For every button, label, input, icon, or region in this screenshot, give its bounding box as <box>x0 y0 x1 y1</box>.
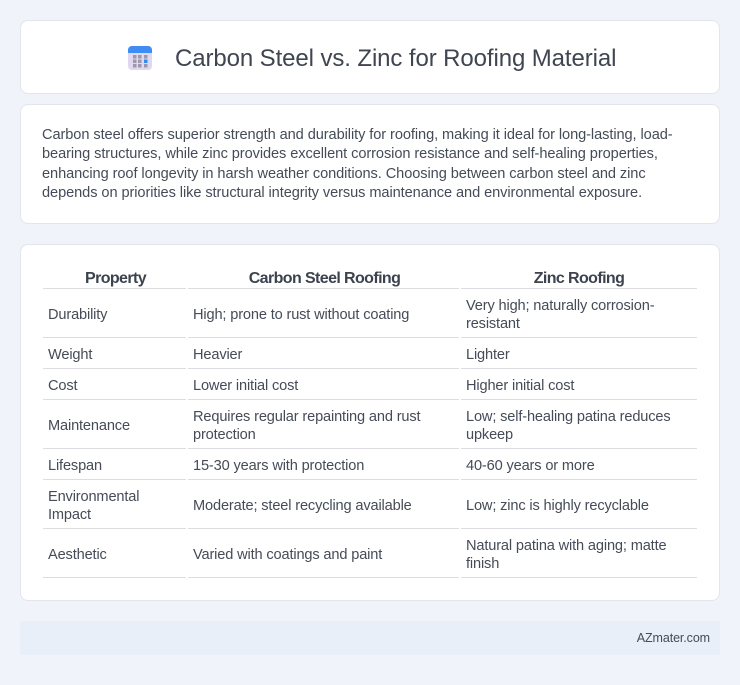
row: maintenance: protection <box>193 427 256 443</box>
summary panel <box>20 104 720 224</box>
row: weight: Weight <box>48 347 92 363</box>
row: cost <box>48 378 574 394</box>
row: durability: High; prone to rust without coating <box>193 307 409 323</box>
row: maintenance: Low; self-healing patina reduces <box>466 409 671 425</box>
row: aesthetic: Varied with coatings and paint <box>193 547 382 563</box>
row: cost: Lower initial cost <box>193 378 298 394</box>
row: cost: Higher initial cost <box>466 378 574 394</box>
summary text <box>42 127 673 201</box>
header panel <box>20 20 720 94</box>
row: maintenance <box>48 409 671 443</box>
row: aesthetic <box>48 538 666 572</box>
comparison table panel <box>20 244 720 601</box>
row: aesthetic: Aesthetic <box>48 547 107 563</box>
row: environmental impact: Moderate; steel recycling available <box>193 498 412 514</box>
icon: calendar grid <box>128 46 152 70</box>
row: durability <box>48 298 654 332</box>
row: weight: Lighter <box>466 347 510 363</box>
row: environmental impact: Impact <box>48 507 91 523</box>
summary text: depends on priorities like structural integrity versus maintenance and environmental exposure. <box>42 185 642 201</box>
footer brand text: AZmater.com <box>637 631 710 645</box>
row: maintenance: Requires regular repainting and rust <box>193 409 420 425</box>
row: weight: Heavier <box>193 347 242 363</box>
row: environmental impact <box>48 489 649 523</box>
row: maintenance: upkeep <box>466 427 513 443</box>
table header row: Property <box>85 270 146 287</box>
title: Carbon Steel vs. Zinc for Roofing Material <box>175 45 616 72</box>
row: aesthetic: finish <box>466 556 499 572</box>
summary text: bearing structures, while zinc provides excellent corrosion resistance and self-healing properties, <box>42 146 658 162</box>
row: durability: resistant <box>466 316 520 332</box>
summary text: enhancing roof longevity in harsh weather conditions. Choosing between carbon steel and zinc <box>42 166 646 182</box>
table header row: Carbon Steel Roofing <box>249 270 400 287</box>
row: maintenance: Maintenance <box>48 418 130 434</box>
row: aesthetic: Natural patina with aging; matte <box>466 538 666 554</box>
row: environmental impact: Low; zinc is highly recyclable <box>466 498 649 514</box>
row: durability: Very high; naturally corrosion- <box>466 298 654 314</box>
row: environmental impact: Environmental <box>48 489 139 505</box>
summary text: Carbon steel offers superior strength and durability for roofing, making it ideal for long-lasting, load- <box>42 127 673 143</box>
row: cost: Cost <box>48 378 77 394</box>
table header row: Zinc Roofing <box>534 270 624 287</box>
row: lifespan <box>48 458 595 474</box>
row: lifespan: 15-30 years with protection <box>193 458 364 474</box>
row: lifespan: 40-60 years or more <box>466 458 595 474</box>
row: durability: Durability <box>48 307 107 323</box>
row: weight <box>48 347 510 363</box>
row: lifespan: Lifespan <box>48 458 102 474</box>
table header row <box>85 270 624 287</box>
footer bar <box>20 621 720 655</box>
